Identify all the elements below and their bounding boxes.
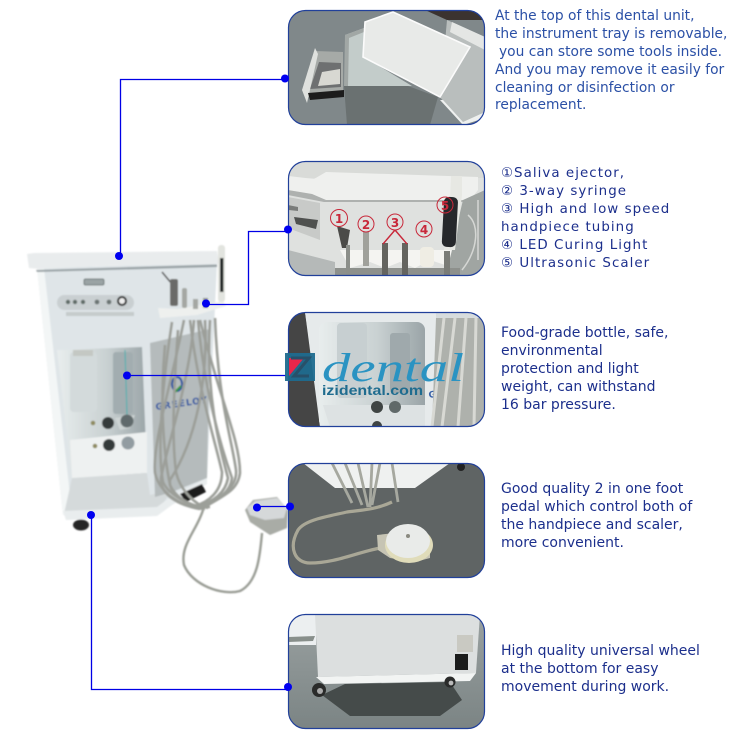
panel: accessories photo: 4 xyxy=(420,223,428,237)
text: bottle description: 16 bar pressure. xyxy=(501,397,616,413)
dark corner xyxy=(428,11,482,20)
manifold holder xyxy=(158,301,226,318)
watermark logo: izidental.com xyxy=(322,382,423,398)
panel border 4 xyxy=(288,464,484,578)
text: accessories list: ⑤ Ultrasonic Scaler xyxy=(501,256,650,271)
scaler xyxy=(442,176,462,250)
text: tray description: At the top of this dental unit, xyxy=(495,8,694,24)
handpieces xyxy=(162,272,208,309)
holder xyxy=(340,250,452,268)
caster xyxy=(457,464,465,471)
panel: accessories photo: 5 xyxy=(441,199,449,213)
connector: wheel xyxy=(92,515,288,690)
casters xyxy=(73,520,89,530)
text: pedal description xyxy=(501,481,693,551)
text: accessories list: ③ High and low speed xyxy=(501,202,670,217)
panel: accessories photo: 1 xyxy=(335,212,343,226)
text: tray description xyxy=(495,8,727,113)
left control strip xyxy=(288,197,320,240)
foot pedal cable xyxy=(183,510,262,592)
tubes xyxy=(332,463,398,507)
lower cabinet xyxy=(64,473,172,514)
brand logo xyxy=(155,377,209,413)
connector dots xyxy=(87,74,294,691)
red labels xyxy=(330,197,453,244)
illustration: dental unit xyxy=(27,245,288,592)
panel border 5 xyxy=(288,614,484,728)
connector: tray xyxy=(120,80,285,255)
bottles xyxy=(70,350,135,430)
text: accessories list: handpiece tubing xyxy=(501,220,635,235)
brand text: GREE xyxy=(428,387,456,401)
panel border 1 xyxy=(288,10,484,124)
text: tray description: cleaning or disinfection or xyxy=(495,80,675,96)
pedal xyxy=(377,533,430,562)
panel: removable instrument tray photo xyxy=(288,10,485,125)
bottles xyxy=(337,323,367,398)
tray lid xyxy=(363,12,470,97)
cabinet base xyxy=(303,463,450,488)
watermark logo: dental xyxy=(322,345,464,390)
drawer xyxy=(307,51,343,97)
text: wheel description xyxy=(501,643,700,695)
cable xyxy=(293,502,392,563)
plate shadow xyxy=(36,264,217,272)
handpieces xyxy=(337,226,450,276)
connector: pedal xyxy=(257,506,290,508)
label + socket xyxy=(457,635,473,652)
gauges xyxy=(91,414,134,451)
text: pedal description: the handpiece and scaler, xyxy=(501,517,683,533)
text: pedal description: Good quality 2 in one foot xyxy=(501,481,684,497)
tray interior xyxy=(345,28,412,86)
gauges xyxy=(371,401,383,413)
bottle compartment xyxy=(57,347,147,478)
panel: wheel photo xyxy=(288,614,485,729)
brand logo: GREELOY xyxy=(155,396,209,413)
handle xyxy=(84,279,104,285)
text: pedal description: more convenient. xyxy=(501,535,624,551)
cabinet body xyxy=(37,263,217,515)
text: accessories list: ④ LED Curing Light xyxy=(501,238,648,253)
wheels xyxy=(312,683,326,697)
connector: bottle xyxy=(127,374,286,376)
foot pedal xyxy=(245,497,288,535)
text: bottle description: Food-grade bottle, safe, xyxy=(501,325,668,341)
text: wheel description: at the bottom for easy xyxy=(501,661,658,677)
top plate xyxy=(27,251,219,269)
base plate xyxy=(63,478,207,520)
watermark logo xyxy=(285,345,464,398)
text: tray description: And you may remove it easily for xyxy=(495,62,725,78)
text: wheel description: High quality universal wheel xyxy=(501,643,700,659)
panel: accessories photo xyxy=(288,161,485,276)
text: bottle description: protection and light xyxy=(501,361,639,377)
panel border 2 xyxy=(288,162,484,276)
top plate xyxy=(288,161,485,178)
text: accessories list xyxy=(501,166,670,271)
tubing xyxy=(155,318,240,509)
control panel xyxy=(57,295,134,316)
ultrasonic scaler xyxy=(218,245,225,302)
text: accessories list: ①Saliva ejector, xyxy=(501,166,625,181)
cabinet body xyxy=(344,86,438,125)
panel: accessories photo: 3 xyxy=(391,216,399,230)
text: tray description: replacement. xyxy=(495,97,586,113)
right tubes xyxy=(450,190,484,275)
panel: accessories photo: 2 xyxy=(362,218,370,232)
tubes xyxy=(432,318,485,427)
text: pedal description: pedal which control both of xyxy=(501,499,693,515)
panel border 3 xyxy=(288,312,484,426)
text: bottle description xyxy=(501,325,668,413)
panel: bottle photo xyxy=(288,312,485,431)
text: tray description: you can store some tools inside. xyxy=(499,44,722,60)
text: accessories list: ② 3-way syringe xyxy=(501,184,627,199)
rear tube recess xyxy=(150,329,210,497)
cabinet xyxy=(315,614,480,677)
shadow xyxy=(322,682,462,716)
connector: accessories xyxy=(206,232,288,304)
text: wheel description: movement during work. xyxy=(501,679,669,695)
right cabinet xyxy=(440,20,485,125)
cabinet left highlight xyxy=(37,268,72,515)
text: bottle description: weight, can withstand xyxy=(501,379,656,395)
text: tray description: the instrument tray is removable, xyxy=(495,26,727,42)
text: bottle description: environmental xyxy=(501,343,603,359)
panel: foot pedal photo xyxy=(288,463,485,578)
